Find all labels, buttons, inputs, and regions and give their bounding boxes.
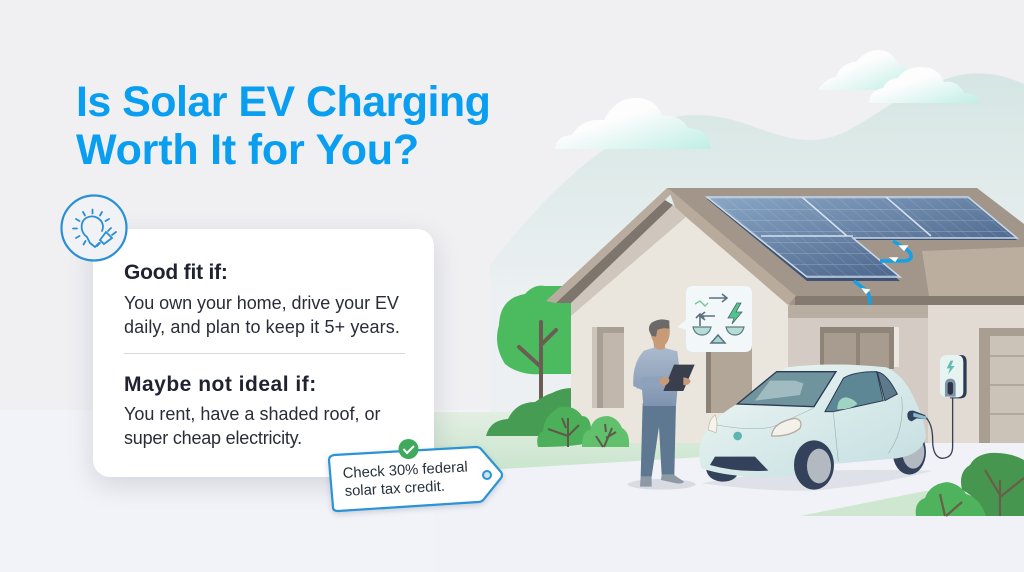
right wall: [928, 305, 1024, 443]
gable left barge: [546, 188, 673, 303]
garage door right: [979, 328, 1024, 443]
clipboard: [663, 365, 695, 391]
tag text: solar tax credit.: [344, 479, 445, 500]
badge: [733, 432, 742, 440]
shoes: [640, 474, 684, 487]
front small wheel: [706, 468, 739, 482]
text: not ideal description: super cheap electricity.: [124, 428, 302, 448]
title: Worth It for You?: [76, 126, 419, 174]
driveway: [434, 440, 1024, 572]
rear wheel: [893, 429, 926, 475]
title: [76, 78, 490, 174]
windshield: [737, 372, 836, 407]
hands: [659, 377, 691, 386]
trousers: [641, 403, 676, 477]
tag text: [342, 459, 469, 500]
house: [546, 188, 1024, 443]
seat and mirror: [837, 397, 857, 409]
icon: green check: [398, 439, 418, 459]
gable wall: [571, 217, 788, 443]
person: [628, 319, 696, 490]
roof eave: [795, 296, 1024, 305]
hair: [649, 319, 669, 337]
heading: good fit: Good fit if:: [124, 261, 228, 284]
lower grille: [710, 457, 768, 471]
main roof: [667, 188, 1024, 305]
left window: [592, 327, 624, 408]
dormer roof: [922, 247, 1024, 296]
neck and head: [650, 323, 670, 351]
title: Is Solar EV Charging: [76, 78, 490, 126]
heading: maybe not ideal: Maybe not ideal if:: [124, 373, 317, 396]
forearm: [637, 376, 663, 389]
side window: [825, 372, 883, 412]
gable soffit: [571, 205, 686, 316]
lawn bottom right: [800, 491, 1024, 516]
gable right barge: [668, 188, 796, 305]
cloud top: [818, 50, 912, 90]
charging station: [925, 355, 967, 458]
text: good fit description: You own your home, drive your EV: [124, 293, 399, 313]
torso: [633, 347, 679, 406]
text: good fit description: daily, and plan to keep it 5+ years.: [124, 317, 400, 337]
blue cables: [854, 241, 911, 305]
text: good fit description: [124, 293, 400, 337]
solar panels: [707, 197, 1017, 281]
lower background band: [0, 410, 1024, 572]
door line: [833, 397, 902, 462]
text: not ideal description: You rent, have a shaded roof, or: [124, 404, 381, 424]
hills: [490, 73, 1024, 420]
tag text: Check 30% federal: [342, 459, 468, 482]
shrubs bottom right: [916, 453, 1024, 516]
callout: tax credit tag: [326, 439, 505, 516]
headlights: [772, 418, 801, 436]
garage door centre: [820, 327, 899, 369]
ground lawn: [434, 412, 720, 473]
text: not ideal description: [124, 404, 381, 448]
charge plug: [907, 411, 928, 421]
front shrubs: [537, 407, 629, 447]
front wheel: [794, 440, 834, 490]
car: [699, 364, 933, 491]
gable dark strip: [556, 200, 673, 303]
tree: [497, 286, 571, 405]
rear window: [877, 372, 897, 401]
car body: [699, 364, 926, 477]
door: [706, 345, 752, 413]
cloud right: [869, 67, 980, 103]
car ground shadow: [702, 470, 933, 491]
wing fascia: [788, 305, 928, 318]
speech bubble with analysis icons: [677, 286, 752, 352]
icon: light bulb with plug: [60, 194, 128, 262]
back hedge: [486, 388, 571, 436]
panel: fit checklist card: [93, 229, 434, 477]
side wing wall: [786, 303, 1024, 443]
cloud left: [555, 98, 711, 149]
